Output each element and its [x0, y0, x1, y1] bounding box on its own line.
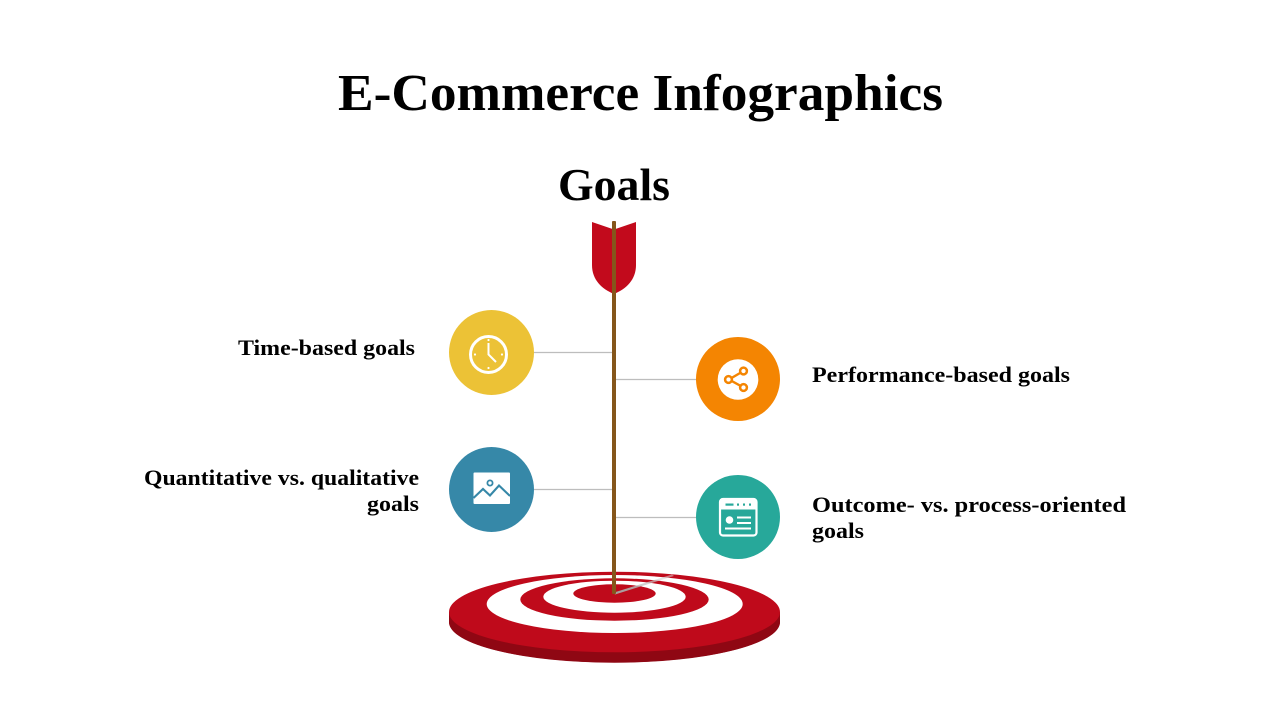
- icon: clock: [449, 310, 534, 395]
- label: Quantitative vs. qualitative: [144, 465, 419, 490]
- label: [144, 465, 419, 516]
- icon: picture: [449, 447, 534, 532]
- label: Time-based goals: [238, 335, 415, 360]
- heading: Goals: Goals: [558, 159, 670, 210]
- connector lines: [533, 352, 697, 518]
- item: outcome vs process-oriented goals: [696, 475, 1126, 559]
- title: E-Commerce Infographics: [338, 65, 943, 122]
- icon: browser window: [696, 475, 780, 559]
- item: performance-based goals: [696, 337, 1070, 421]
- label: Outcome- vs. process-oriented: [812, 492, 1126, 517]
- label: goals: [812, 518, 864, 543]
- arrow: [592, 221, 636, 594]
- arrow fletching: [592, 222, 636, 294]
- item: time-based goals: [238, 310, 534, 395]
- item: quantitative vs qualitative goals: [144, 447, 534, 532]
- icon: share: [696, 337, 780, 421]
- arrow shaft: [612, 221, 616, 594]
- arrow shadow: [614, 574, 674, 594]
- target board: [449, 572, 780, 663]
- label: goals: [367, 491, 419, 516]
- label: Performance-based goals: [812, 362, 1070, 387]
- label: [812, 492, 1126, 543]
